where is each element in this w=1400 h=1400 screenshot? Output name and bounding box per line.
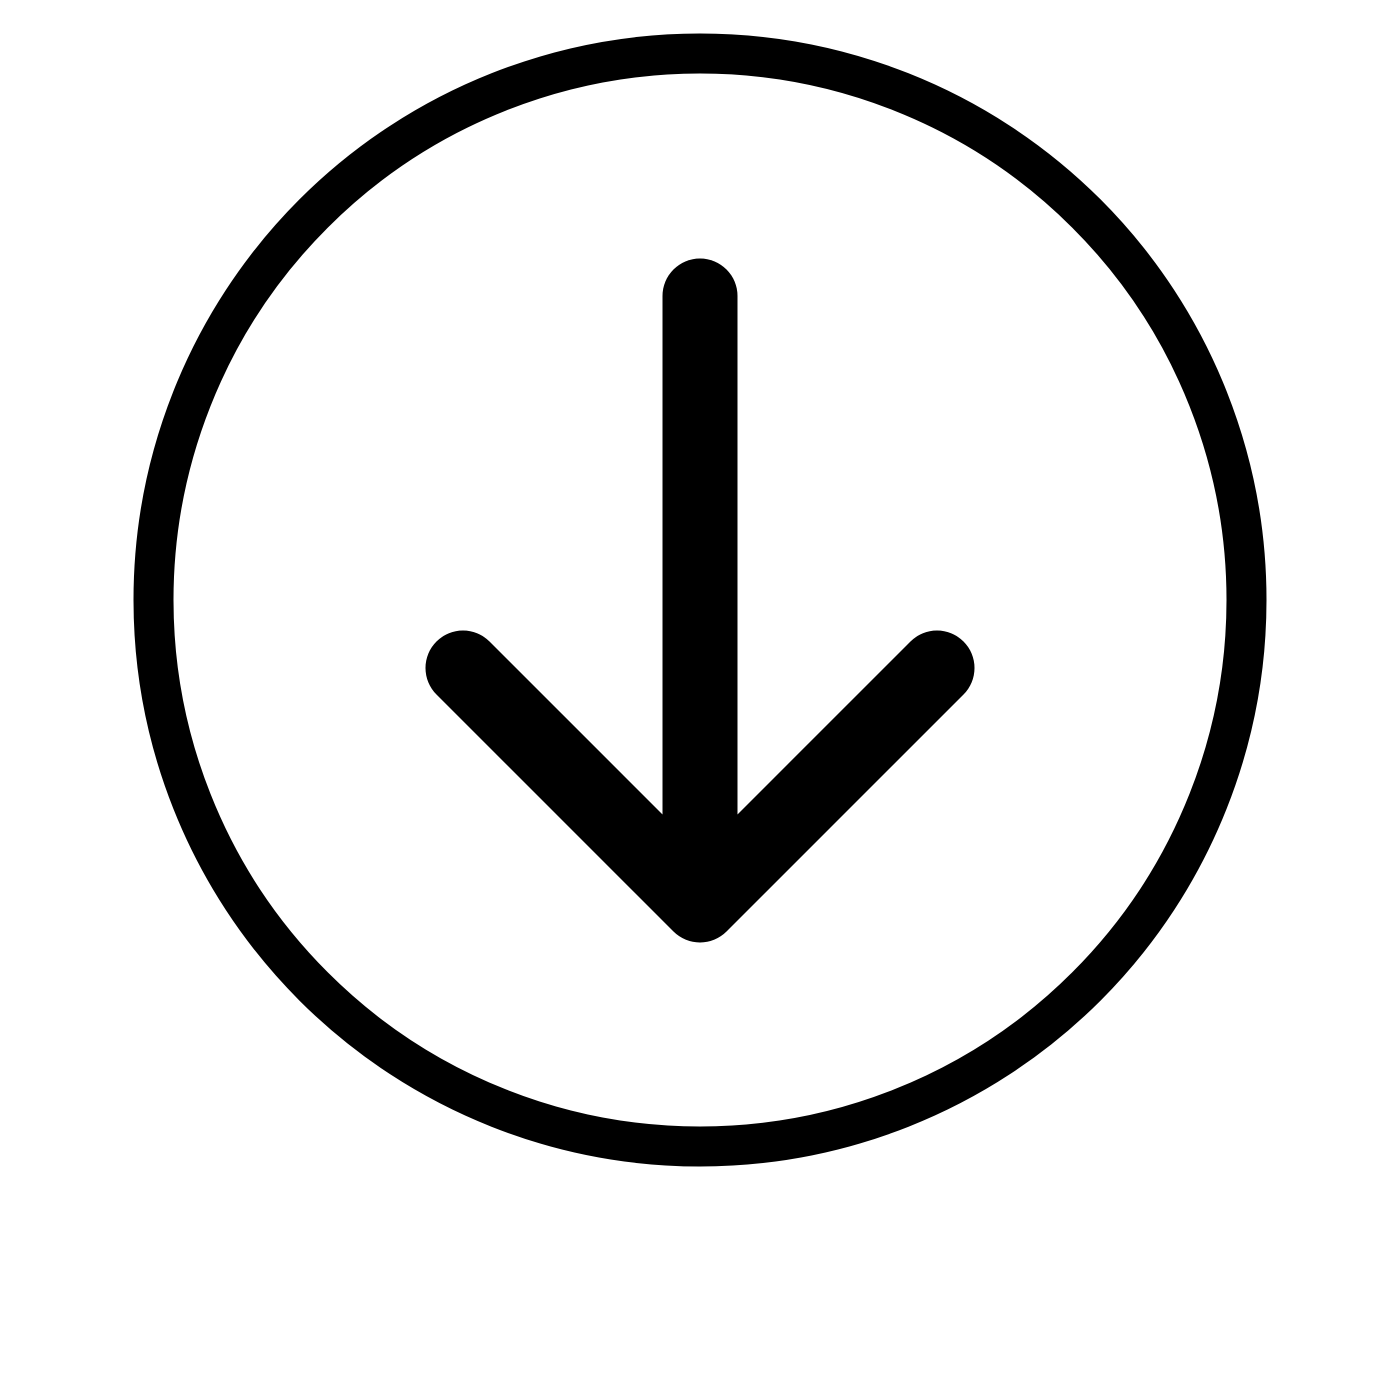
icon: circle outline bbox=[154, 54, 1246, 1146]
icon: arrow bbox=[463, 296, 937, 905]
